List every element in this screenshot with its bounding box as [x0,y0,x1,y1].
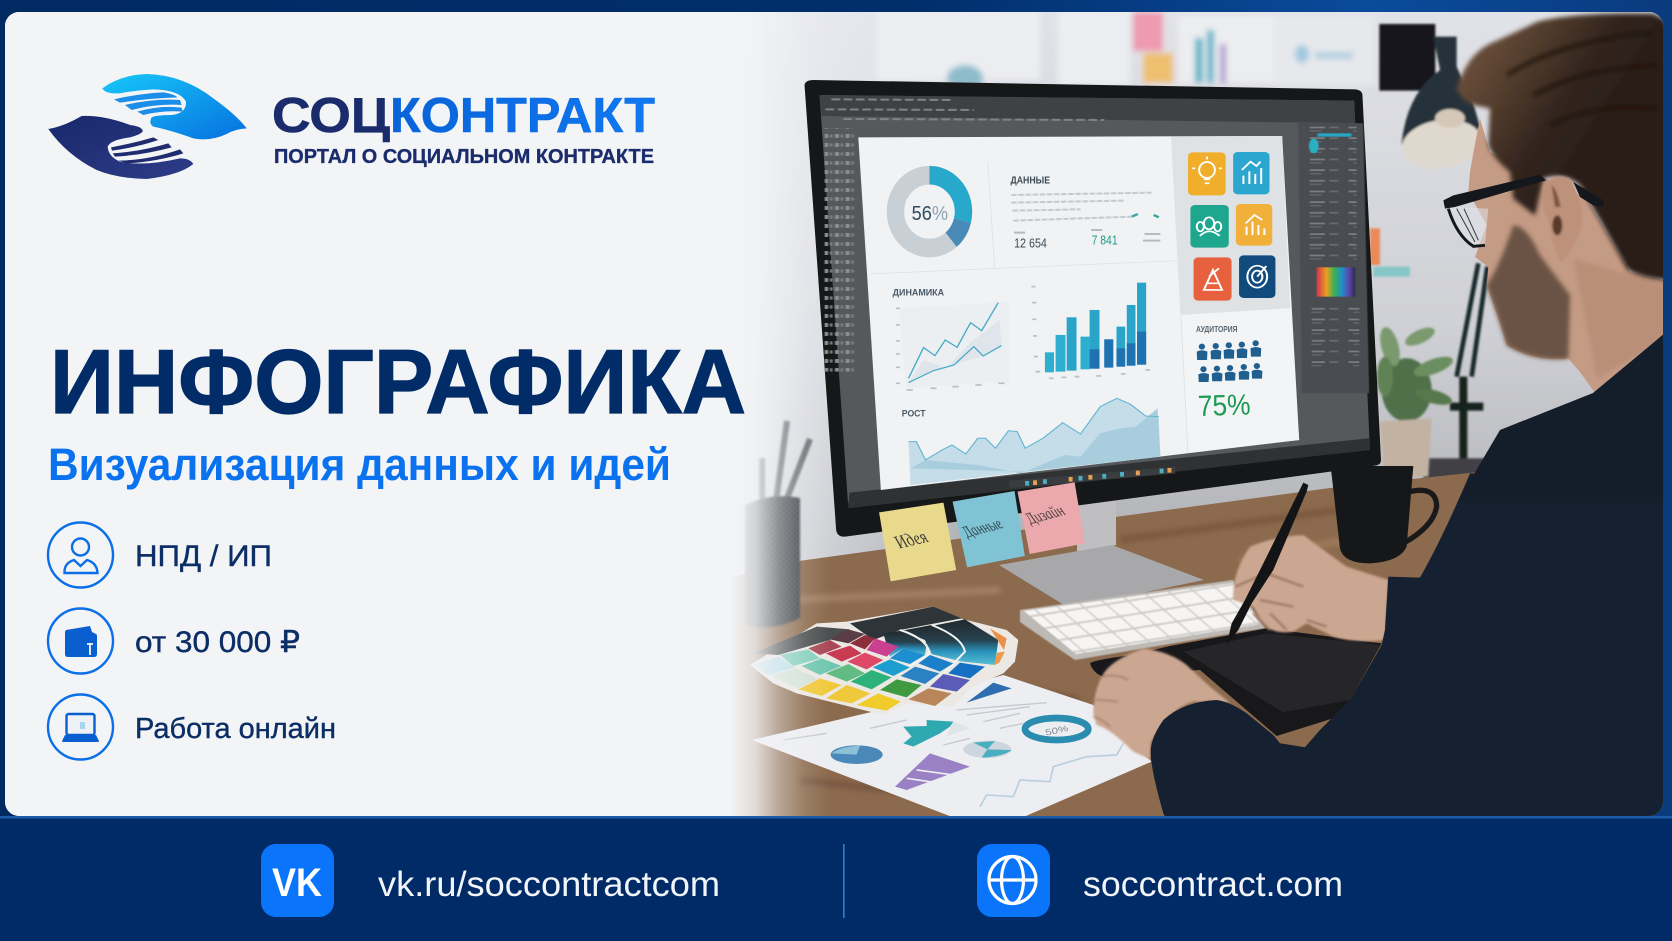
pencil holder with pens [745,421,810,627]
icon: hands [48,74,247,179]
icon: laptop [48,694,113,760]
feature: от 30 000 ₽: от 30 000 ₽ [135,626,300,659]
audience block: 75% [1197,388,1251,422]
sweater [1151,473,1672,847]
icon: VK [261,844,334,917]
icon tiles [1188,152,1275,301]
area chart: РОСТ [902,409,926,419]
sticky: Данные: Данные [956,515,1008,541]
footer link: VK [261,844,720,917]
donut chart: 56% [912,202,948,225]
area chart [902,398,1160,485]
document canvas [858,136,1299,490]
data block [1011,175,1160,251]
beard [1487,225,1570,359]
sweater collar [1457,333,1665,503]
desk [737,472,1663,816]
sticky: Идея [879,503,956,581]
icon: wallet [48,608,113,674]
glasses [1443,175,1603,246]
pen [1227,483,1308,645]
lamp and wall box [1370,24,1487,500]
left hand [1093,648,1230,759]
data block: 12 654 [1014,237,1047,251]
line chart [893,288,1009,390]
sticky notes [879,482,1085,581]
sticky: Дизайн [1018,482,1085,554]
footer link: VK: vk.ru/soccontractcom [378,865,720,904]
colour swatch fan [750,607,1018,715]
sticky: Данные [953,491,1025,567]
mug [1331,466,1437,563]
tagline: ПОРТАЛ О СОЦИАЛЬНОМ КОНТРАКТЕ [274,146,654,168]
feature: НПД / ИП [48,522,272,588]
footer link: website: soccontract.com [1083,865,1343,904]
audience block [1196,325,1262,422]
left toolbar [825,128,855,372]
tablet, hands and person's torso [1090,466,1672,847]
data block: ДАННЫЕ [1011,175,1050,186]
footer divider [843,844,845,918]
face and neck [1468,119,1670,395]
audience block: АУДИТОРИЯ [1196,325,1237,334]
feature: Работа онлайн [48,694,336,760]
bar chart [1031,283,1150,378]
sticky: Идея: Идея [888,526,933,552]
man's head [1443,13,1670,395]
wordmark: СОЦ [272,89,390,143]
right panels [1298,122,1369,393]
wall background [768,12,1663,561]
subtitle: Визуализация данных и идей [48,439,671,490]
paper with charts: 50% [1044,723,1070,738]
taskbar [1009,467,1175,488]
icon: person [48,522,113,588]
right hand [1233,535,1388,641]
feature: Работа онлайн: Работа онлайн [135,713,336,745]
keyboard [1020,580,1265,660]
monitor [805,80,1381,537]
photo fade overlay [730,12,830,816]
scene right: lamp and plant [1370,24,1487,500]
plant [1376,324,1455,477]
footer link: website [977,844,1343,917]
icon: VK: VK [272,861,322,905]
logo: КОНТРАКТ [390,89,655,143]
line chart: ДИНАМИКА [893,288,945,298]
title: ИНФОГРАФИКА [50,332,746,433]
hair [1457,13,1670,280]
paper with charts [752,675,1152,820]
data block: 7 841 [1092,234,1118,248]
ear [1542,176,1582,262]
icon: globe [977,844,1050,917]
sticky: Дизайн: Дизайн [1019,502,1070,528]
graphics tablet [1090,628,1382,736]
feature: от 30 000 ₽ [48,608,300,674]
monitor stand [999,510,1204,604]
donut chart [895,175,963,248]
feature: НПД / ИП: НПД / ИП [135,540,272,573]
logo [48,74,655,179]
